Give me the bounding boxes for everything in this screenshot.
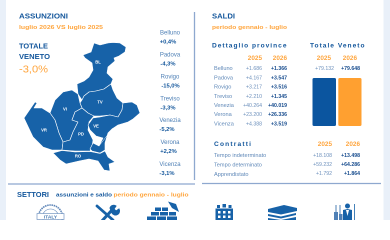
table: province detail: +23.200 [243,112,262,118]
province percentages: Rovigo [161,74,180,80]
table: contratti: +18.108 [313,153,332,159]
table: contratti: Apprendistato [214,172,249,178]
map labels: VI [63,106,67,112]
map: Rovigo [53,150,115,171]
province percentages: Padova [160,52,181,58]
province percentages: -3,1% [159,171,175,177]
map labels: VR [41,128,47,132]
table: contratti: +64.286 [341,162,360,168]
map: Venezia [88,102,140,153]
panel: saldi [212,12,364,178]
table: contratti: +13.498 [341,153,360,159]
table: contratti: Tempo indeterminato [214,153,266,159]
province percentages: -3,3% [160,106,176,112]
table: province detail: Venezia [214,103,235,109]
map labels: TV [97,100,103,104]
table: province detail: +1.366 [271,66,287,72]
province percentages [159,30,181,177]
table: province detail: +3.217 [246,85,262,91]
bar chart: total Veneto: +79.648 [341,66,360,72]
table: province detail: +40.019 [268,103,287,109]
map: Verona [24,102,63,150]
subheading: period comparison: luglio 2026 VS luglio 2025 [19,25,104,31]
bar chart: total Veneto: Totale Veneto [310,42,364,50]
table: province detail: Vicenza [214,122,235,128]
province percentages: +0,4% [160,40,176,46]
total Veneto: TOTALE [19,42,48,50]
subheading: settori period [56,192,189,198]
bar chart: total Veneto: +79.132 [315,66,334,72]
map: Vicenza [50,90,82,142]
province percentages: Vicenza [159,162,181,168]
heading: assunzioni: ASSUNZIONI [19,12,68,20]
province percentages: Venezia [159,118,181,124]
table: contratti [214,141,360,178]
panel: settori [17,190,354,229]
map: Belluno [77,42,126,100]
table: province detail: +3.519 [271,122,287,128]
province percentages: -4,3% [160,62,176,68]
bar chart: total Veneto: 2025 [317,55,331,62]
table: province detail: +2.210 [246,94,262,100]
table: province detail: Treviso [214,94,232,100]
subheading: settori period: periodo gennaio - luglio [114,192,189,198]
map: Treviso [80,84,123,117]
table: contratti: +59.232 [313,162,332,168]
map labels: RO [75,154,82,158]
table: province detail: +26.336 [268,112,287,118]
province percentages: Belluno [160,30,181,36]
table: province detail: +3.516 [271,85,287,91]
table: province detail: +4.167 [246,75,262,81]
table: province detail: Rovigo [214,85,231,91]
table: province detail: 2025 [248,55,262,62]
bar chart: total Veneto: 2026 [346,141,360,148]
icon: books [268,205,297,220]
heading: saldi: SALDI [212,12,235,20]
icon: tools [97,205,120,222]
icon: made in Italy stamp [37,205,64,229]
table: contratti: +1.792 [316,171,332,177]
table: province detail: Belluno [214,66,233,72]
map: Padova [62,108,94,151]
table: province detail: +4.388 [246,122,262,128]
total Veneto: VENETO [19,52,50,61]
total Veneto [19,42,50,76]
table: province detail: Verona [214,112,233,118]
lagoon [99,128,113,146]
icon: cleaning worker [334,204,354,220]
table: province detail: +40.264 [243,103,262,109]
bar chart: total Veneto: 2025 [318,141,332,148]
table: province detail [212,42,287,128]
total Veneto: -3,0% [19,64,48,76]
table: province detail: Padova [214,75,234,81]
subheading: settori period: assunzioni e saldo [56,192,112,198]
province percentages: -5,2% [159,127,175,133]
heading: settori: SETTORI [17,190,49,199]
table: contratti: Contratti [214,141,251,148]
icon: hotel [216,204,233,220]
province percentages: +2,2% [160,149,177,155]
bar chart: total Veneto: 2026 [343,55,357,62]
map labels: VE [93,124,99,128]
bar chart: total Veneto [310,42,364,148]
table: province detail: +3.547 [271,75,287,81]
map of Veneto provinces [24,42,140,171]
map labels [41,60,103,158]
table: contratti: +1.864 [344,171,360,177]
table: province detail: 2026 [273,55,287,62]
table: province detail: Dettaglio province [212,42,287,50]
province percentages: -15,0% [161,84,180,90]
map labels: PD [78,132,84,136]
table: province detail: +1.686 [246,66,262,72]
province percentages: Verona [160,140,180,146]
table: province detail: +1.345 [271,94,287,100]
subheading: saldi period: periodo gennaio - luglio [212,25,288,31]
table: contratti: Tempo determinato [214,162,262,168]
panel: assunzioni [19,12,181,177]
province percentages: Treviso [160,96,180,102]
icon: bricks and trowel [147,202,179,220]
map labels: BL [95,60,101,64]
